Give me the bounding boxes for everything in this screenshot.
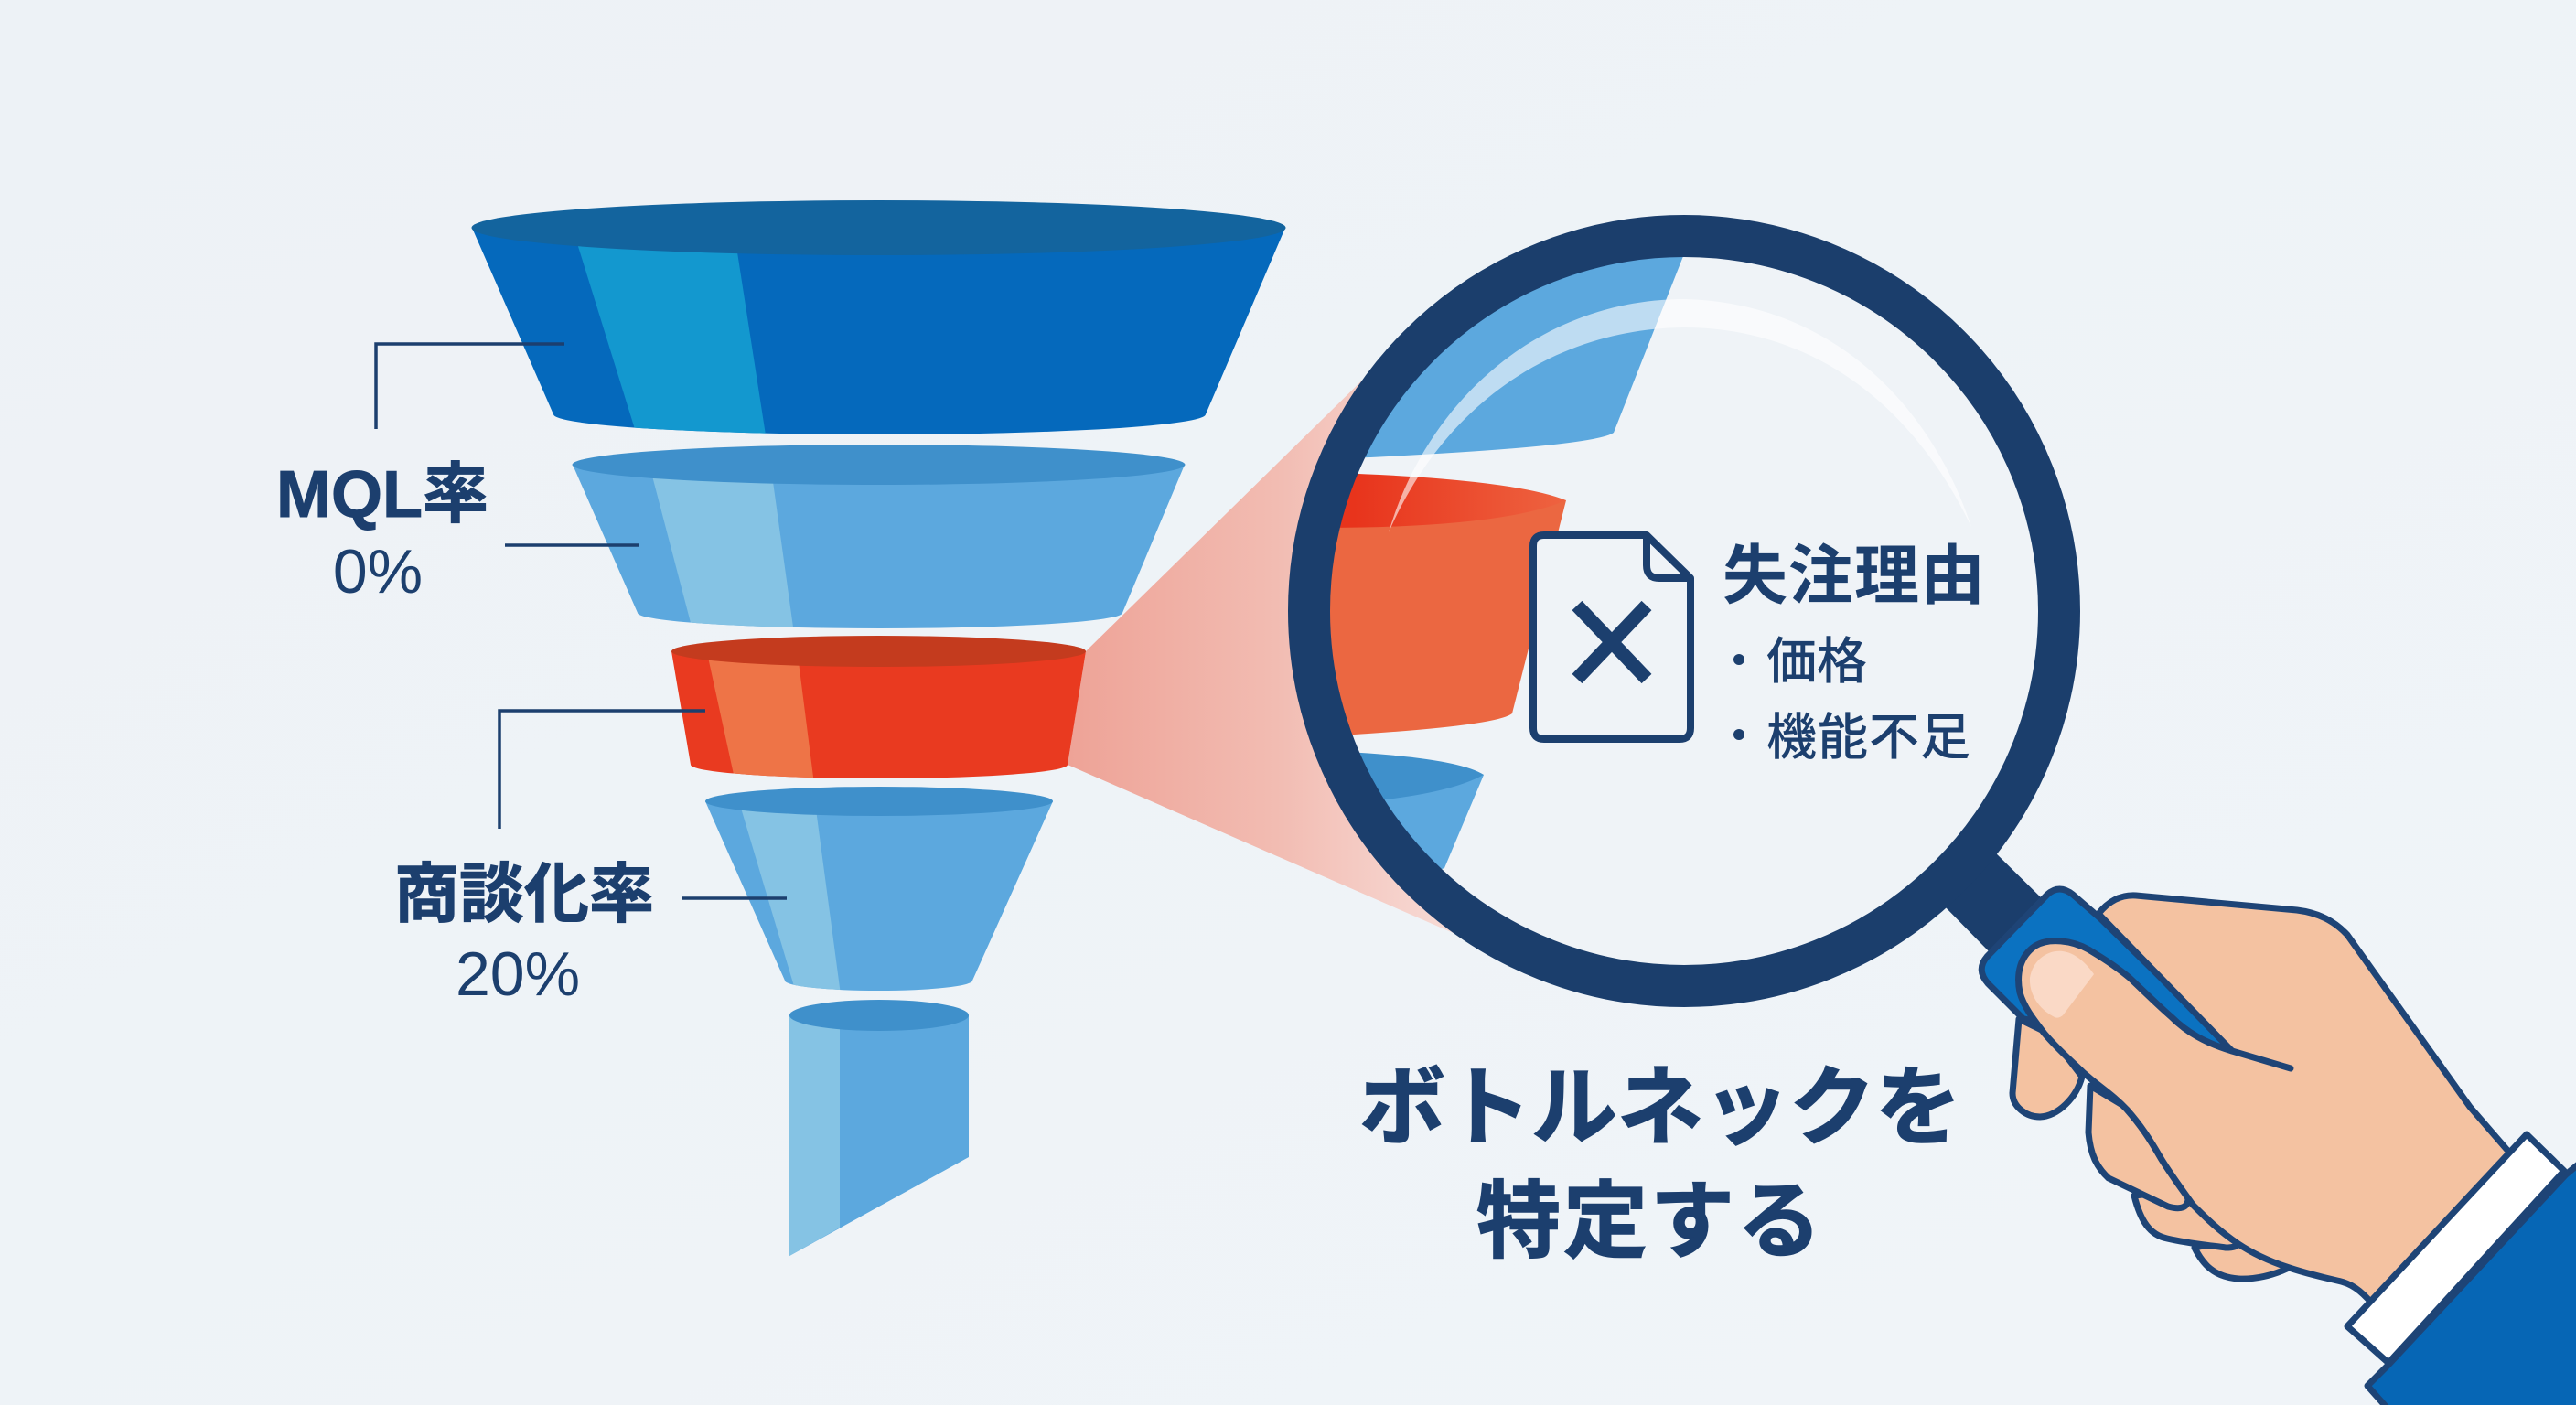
magnified red stage bbox=[1308, 472, 1566, 737]
shirt cuff bbox=[2347, 1134, 2564, 1363]
headline: ボトルネックを bbox=[1359, 1059, 1961, 1155]
finger 4 bbox=[2195, 1235, 2287, 1279]
magnifier handle bbox=[1939, 847, 2049, 951]
lost-deal reasons text: 機能不足 bbox=[1766, 709, 1971, 766]
funnel stage 3: red bottleneck bbox=[671, 636, 1086, 791]
magnified beam from red stage to lens bbox=[1068, 370, 1464, 938]
headline bbox=[1359, 1059, 1961, 1269]
funnel stage 4: light blue bbox=[705, 787, 1053, 1002]
funnel bbox=[472, 200, 1286, 1256]
infographic canvas bbox=[280, 200, 2576, 1405]
label: opportunity conversion rate: 20% bbox=[456, 939, 580, 1009]
funnel stage 1: dark blue bbox=[472, 200, 1286, 453]
palm and thumb bbox=[2019, 896, 2511, 1303]
lens highlight bbox=[1389, 299, 1971, 532]
magnifying glass lens contents bbox=[1330, 257, 1970, 880]
thumb crease bbox=[2232, 1051, 2291, 1068]
magnified lower stage bbox=[1359, 752, 1484, 869]
label: MQL rate: MQL率 bbox=[276, 458, 488, 531]
lost-deal reasons text: 価格 bbox=[1766, 633, 1867, 690]
magnifier ring bbox=[1309, 236, 2059, 986]
lost-deal reasons text bbox=[1723, 541, 1986, 766]
label: opportunity conversion rate bbox=[394, 859, 654, 1009]
hand holding magnifier bbox=[1981, 889, 2576, 1405]
jacket sleeve bbox=[2367, 1162, 2576, 1405]
callout lines bbox=[376, 344, 787, 898]
finger 2 bbox=[2088, 1086, 2188, 1208]
headline: 特定する bbox=[1476, 1175, 1824, 1269]
funnel stage 2: light blue bbox=[573, 445, 1186, 640]
thumb nail bbox=[2030, 951, 2094, 1018]
label: opportunity conversion rate: 商談化率 bbox=[394, 859, 654, 931]
label: MQL rate bbox=[276, 458, 488, 606]
funnel spout bbox=[789, 1000, 969, 1256]
lost-deal reasons text: 失注理由 bbox=[1723, 541, 1986, 613]
label: MQL rate: 0% bbox=[333, 537, 423, 606]
finger 1 bbox=[2012, 1019, 2082, 1117]
finger 3 bbox=[2134, 1189, 2238, 1248]
icon: rejected document bbox=[1533, 535, 1690, 739]
magnified blue stage bbox=[1365, 257, 1683, 457]
magnifier grip bbox=[1981, 889, 2237, 1052]
